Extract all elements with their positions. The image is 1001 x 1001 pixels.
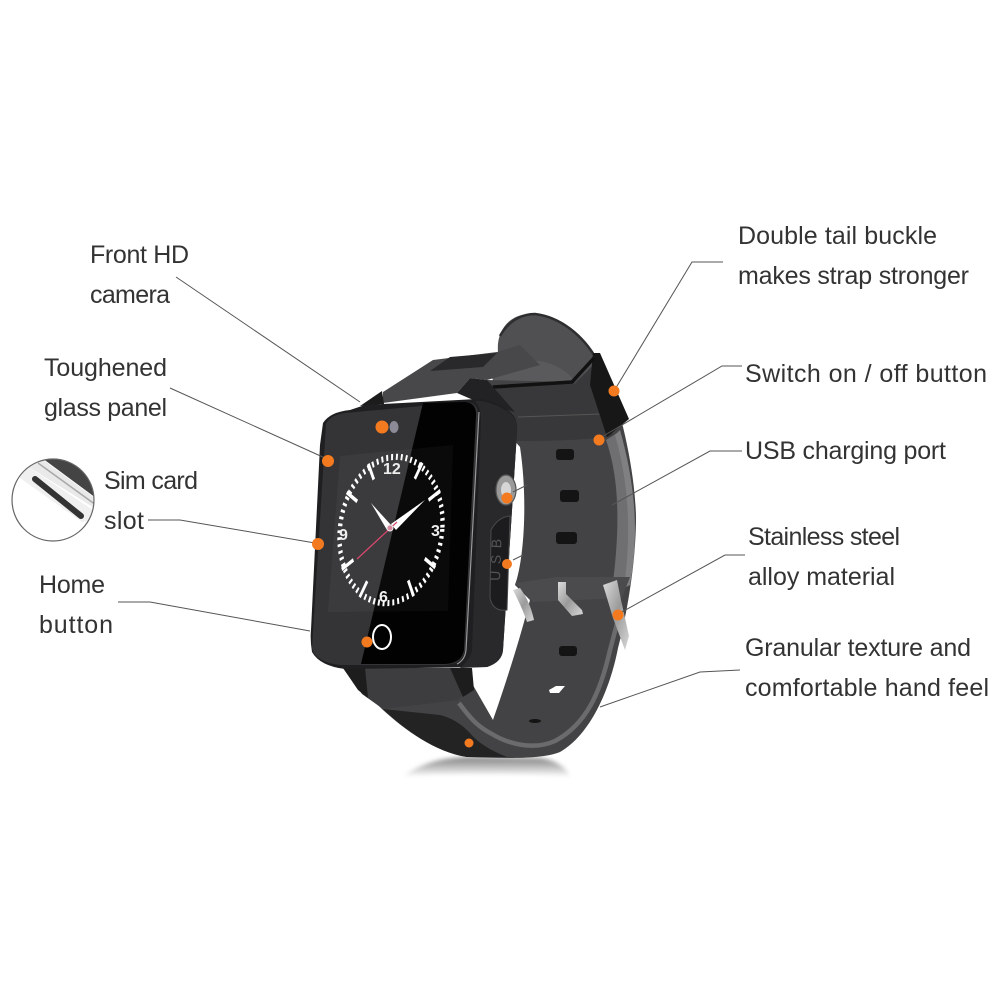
- label: Front HD camera: [90, 241, 189, 309]
- double tail buckle keeper: [493, 353, 629, 437]
- watch body: [311, 345, 540, 709]
- label: Front HD camera: camera: [90, 281, 170, 309]
- camera lens: [390, 421, 398, 433]
- strap: holes: [529, 449, 579, 723]
- label: Stainless steel alloy material: alloy material: [748, 563, 895, 591]
- label: Double tail buckle: [738, 222, 969, 290]
- dial numerals: 3: [431, 523, 440, 540]
- stainless steel buckle: [513, 580, 629, 650]
- shadow under the watch: [403, 757, 571, 777]
- label: Sim card slot: Sim card: [104, 467, 198, 495]
- dial numerals: [339, 461, 440, 606]
- label: Granular texture: [745, 634, 989, 702]
- label: Double tail buckle: makes strap stronger: [738, 262, 969, 290]
- black glass reflection: [361, 402, 476, 664]
- strap: buckle crossing band: [515, 577, 630, 602]
- minute ticks: [335, 456, 447, 604]
- label: Home button: [39, 571, 113, 639]
- label: Home button: Home: [39, 571, 105, 599]
- label: Granular texture: comfortable hand feel: [745, 674, 989, 702]
- hour ticks: [340, 462, 442, 598]
- strap: outer rim upper: [606, 433, 633, 590]
- leader lines: [118, 262, 745, 707]
- strap: top loop end: [495, 314, 600, 392]
- label: Stainless steel alloy material: Stainless steel: [748, 523, 900, 551]
- dial numerals: 9: [339, 527, 348, 544]
- right side of case: [460, 401, 517, 668]
- side power button: [496, 475, 516, 505]
- dial panel: [328, 445, 453, 612]
- icon: sim card slot close-up: [12, 450, 96, 541]
- label: Toughened glass panel: glass panel: [44, 394, 167, 422]
- label: Home button: button: [39, 611, 113, 639]
- label: Toughened glass panel: Toughened: [44, 354, 167, 382]
- side USB port cover: USB: [487, 539, 504, 581]
- label: Stainless steel alloy material: [748, 523, 900, 591]
- glass edge highlight: [457, 412, 479, 664]
- label: Sim card slot: slot: [104, 507, 144, 535]
- label: Double tail buckle: Double tail buckle: [738, 222, 937, 250]
- dial numerals: 6: [379, 589, 388, 606]
- strap: darker upper section: [487, 360, 613, 441]
- strap: main band: [362, 360, 636, 758]
- glass front: [312, 402, 478, 665]
- label: USB charging port: USB charging port: [745, 437, 946, 465]
- dial numerals: 12: [383, 461, 401, 478]
- label: Sim card slot: [104, 467, 198, 535]
- case: [311, 399, 517, 669]
- strap: textured lower section: [383, 709, 507, 757]
- top lug: [383, 345, 540, 403]
- orange marker dots: [312, 386, 624, 748]
- clock hands: [357, 500, 425, 559]
- side USB port cover: [487, 516, 510, 610]
- watch strap: [362, 314, 636, 758]
- strap: light rim lower: [459, 620, 618, 746]
- label: Granular texture: Granular texture and: [745, 634, 971, 662]
- home button ring: [373, 625, 391, 649]
- label: Front HD camera: Front HD: [90, 241, 189, 269]
- label: Toughened glass panel: [44, 354, 167, 422]
- bottom lug: [343, 668, 472, 709]
- label: Switch on / off button: Switch on / off button: [745, 360, 987, 388]
